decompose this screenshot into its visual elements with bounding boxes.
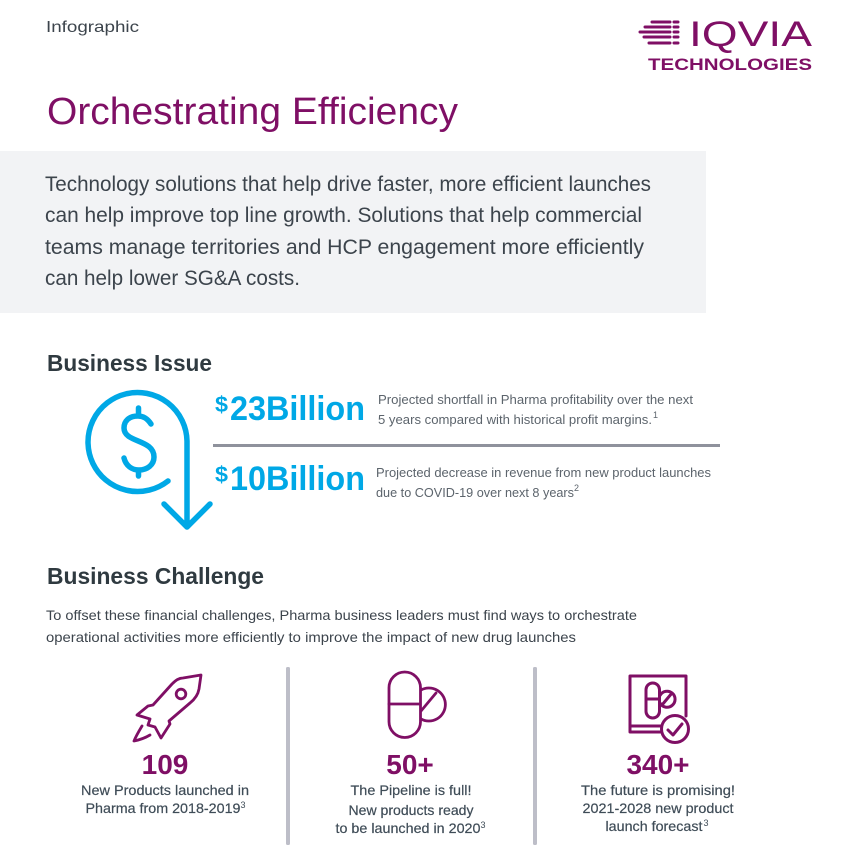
stat description: due to COVID-19 over next 8 years — [376, 485, 574, 500]
stat description: Projected shortfall in Pharma profitability over the next — [378, 392, 693, 407]
column: 340+: 340+ — [626, 749, 690, 780]
intro text: Technology solutions that help drive faster, more efficient launches — [45, 173, 651, 196]
caption — [81, 782, 249, 816]
column: 50+ — [336, 672, 486, 836]
document label: Infographic — [46, 19, 139, 36]
caption: to be launched in 2020 — [336, 820, 481, 836]
icon: medicine book with check — [630, 676, 688, 742]
stat: 10 billion: $ — [215, 462, 228, 487]
stat: 23 billion — [215, 390, 693, 428]
column: 340+ — [581, 676, 735, 834]
stat: 10 billion: 10Billion — [230, 460, 365, 498]
caption: 3 — [703, 818, 709, 828]
caption: New products ready — [348, 802, 474, 818]
intro text — [45, 173, 651, 290]
logo wordmark: IQVIA — [689, 15, 813, 54]
logo: IQVIA Technologies — [640, 15, 813, 74]
stat description — [378, 392, 693, 427]
challenge text — [46, 607, 637, 645]
icon: rocket — [134, 675, 201, 741]
challenge text: To offset these financial challenges, Pharma business leaders must find ways to orchestrate — [46, 607, 637, 623]
caption: 3 — [480, 820, 486, 830]
intro text: can help improve top line growth. Solutions that help commercial — [45, 204, 642, 227]
caption: 2021-2028 new product — [582, 800, 734, 816]
intro text: teams manage territories and HCP engagement more efficiently — [45, 236, 644, 259]
caption: launch forecast — [606, 818, 703, 834]
panel: intro — [0, 151, 706, 313]
icon: dollar with down arrow — [88, 393, 210, 527]
title: Orchestrating Efficiency — [47, 91, 458, 133]
intro text: can help lower SG&A costs. — [45, 267, 300, 290]
icon: pills — [389, 672, 445, 738]
stat: 23 billion: $ — [215, 392, 228, 417]
heading: business issue: Business Issue — [47, 350, 212, 376]
caption: New Products launched in — [81, 782, 249, 798]
caption: Pharma from 2018-2019 — [86, 800, 241, 816]
caption — [336, 782, 486, 836]
challenge text: operational activities more efficiently to improve the impact of new drug launches — [46, 629, 576, 645]
stat description: 5 years compared with historical profit margins. — [378, 412, 652, 427]
column: 109: 109 — [142, 749, 188, 780]
column: 109 — [81, 675, 249, 816]
stat: 10 billion — [215, 460, 711, 500]
heading: business challenge: Business Challenge — [47, 563, 264, 589]
logo subline: TECHNOLOGIES — [648, 55, 812, 74]
column: 50+: 50+ — [386, 749, 434, 780]
logo speed lines — [640, 22, 678, 43]
caption: 3 — [240, 800, 246, 810]
stat description: 2 — [574, 483, 579, 493]
caption: The future is promising! — [581, 782, 735, 798]
stat: 23 billion: 23Billion — [230, 390, 365, 428]
stat description — [376, 465, 711, 500]
stat description: 1 — [653, 410, 658, 420]
stat description: Projected decrease in revenue from new product launches — [376, 465, 711, 480]
caption — [581, 782, 735, 834]
caption: The Pipeline is full! — [350, 782, 472, 798]
